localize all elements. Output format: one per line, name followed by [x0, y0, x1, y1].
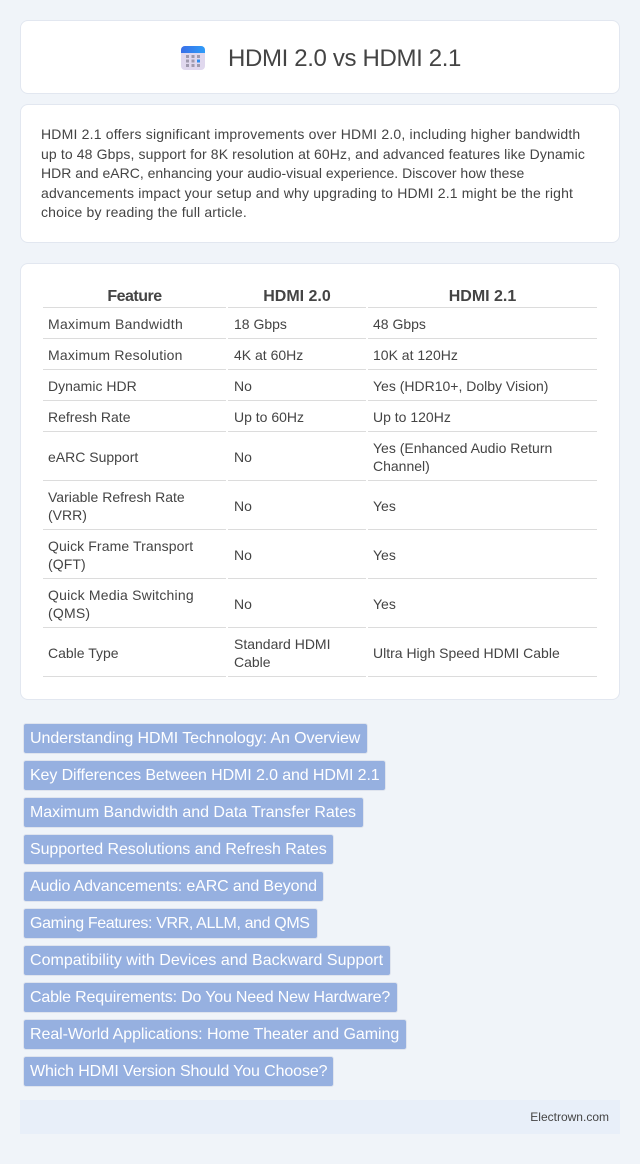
topic link	[23, 871, 324, 902]
comparison table: (QFT)	[48, 556, 86, 572]
footer credit: Electrown.com	[530, 1110, 609, 1124]
comparison table: Yes	[373, 596, 396, 612]
comparison table: 18 Gbps	[234, 316, 287, 332]
comparison table: Maximum Bandwidth	[48, 316, 183, 332]
comparison table: Maximum Resolution	[48, 347, 183, 363]
intro paragraph: up to 48 Gbps, support for 8K resolution at 60Hz, and advanced features like Dynamic	[41, 146, 585, 162]
topic link: Maximum Bandwidth and Data Transfer Rates	[30, 804, 356, 821]
comparison table: No	[234, 449, 252, 465]
comparison table: Yes	[373, 547, 396, 563]
topic link: Real-World Applications: Home Theater and Gaming	[30, 1026, 399, 1043]
comparison table: Channel)	[373, 458, 430, 474]
topic link	[23, 797, 364, 828]
comparison table: 48 Gbps	[373, 316, 426, 332]
comparison table: Up to 60Hz	[234, 409, 304, 425]
topic link	[23, 908, 318, 939]
comparison table: Quick Media Switching	[48, 587, 194, 603]
comparison table: (QMS)	[48, 605, 90, 621]
topic link: Understanding HDMI Technology: An Overview	[30, 730, 360, 747]
intro paragraph: advancements impact your setup and why upgrading to HDMI 2.1 might be the right	[41, 184, 573, 200]
title panel	[20, 20, 620, 94]
comparison table: Dynamic HDR	[48, 378, 137, 394]
topic link	[23, 982, 398, 1013]
comparison table: Standard HDMI	[234, 636, 330, 652]
table header: HDMI 2.1	[449, 288, 516, 305]
intro paragraph: HDMI 2.1 offers significant improvements over HDMI 2.0, including higher bandwidth	[41, 126, 580, 142]
comparison table: 10K at 120Hz	[373, 347, 458, 363]
comparison table: Quick Frame Transport	[48, 538, 193, 554]
topic link	[23, 1056, 334, 1087]
table header: Feature	[107, 288, 162, 305]
topic link: Which HDMI Version Should You Choose?	[30, 1063, 327, 1080]
comparison table panel	[20, 263, 620, 700]
comparison table: Yes (Enhanced Audio Return	[373, 440, 552, 456]
comparison table	[43, 288, 597, 677]
comparison table: eARC Support	[48, 449, 138, 465]
topic link	[23, 945, 391, 976]
comparison table: Up to 120Hz	[373, 409, 451, 425]
comparison table: No	[234, 378, 252, 394]
comparison table: Cable Type	[48, 645, 119, 661]
intro text panel	[20, 104, 620, 243]
comparison table: No	[234, 498, 252, 514]
comparison table: Refresh Rate	[48, 409, 130, 425]
comparison table: Ultra High Speed HDMI Cable	[373, 645, 560, 661]
intro paragraph: choice by reading the full article.	[41, 204, 247, 220]
comparison table: (VRR)	[48, 507, 87, 523]
topic link	[23, 760, 386, 791]
topic link: Key Differences Between HDMI 2.0 and HDMI 2.1	[30, 767, 380, 784]
table header	[43, 288, 597, 308]
topic link	[23, 834, 334, 865]
comparison table: Yes	[373, 498, 396, 514]
topic link: Audio Advancements: eARC and Beyond	[30, 878, 317, 895]
topic link	[23, 1019, 407, 1050]
footer bar	[20, 1100, 620, 1134]
topic link: Gaming Features: VRR, ALLM, and QMS	[30, 915, 310, 932]
topic link	[23, 723, 368, 754]
comparison table: Yes (HDR10+, Dolby Vision)	[373, 378, 548, 394]
icon: calendar grid	[181, 46, 205, 70]
heading: HDMI 2.0 vs HDMI 2.1	[228, 45, 461, 72]
topic link: Supported Resolutions and Refresh Rates	[30, 841, 327, 858]
intro paragraph: HDR and eARC, enhancing your audio-visual experience. Discover how these	[41, 165, 524, 181]
comparison table: Variable Refresh Rate	[48, 489, 185, 505]
topic link: Cable Requirements: Do You Need New Hardware?	[30, 989, 390, 1006]
comparison table: Cable	[234, 654, 271, 670]
comparison table: 4K at 60Hz	[234, 347, 303, 363]
topic link: Compatibility with Devices and Backward Support	[30, 952, 383, 969]
comparison table: No	[234, 547, 252, 563]
table header: HDMI 2.0	[263, 288, 331, 305]
intro paragraph	[41, 126, 585, 220]
topic links list	[23, 723, 407, 1087]
comparison table: No	[234, 596, 252, 612]
